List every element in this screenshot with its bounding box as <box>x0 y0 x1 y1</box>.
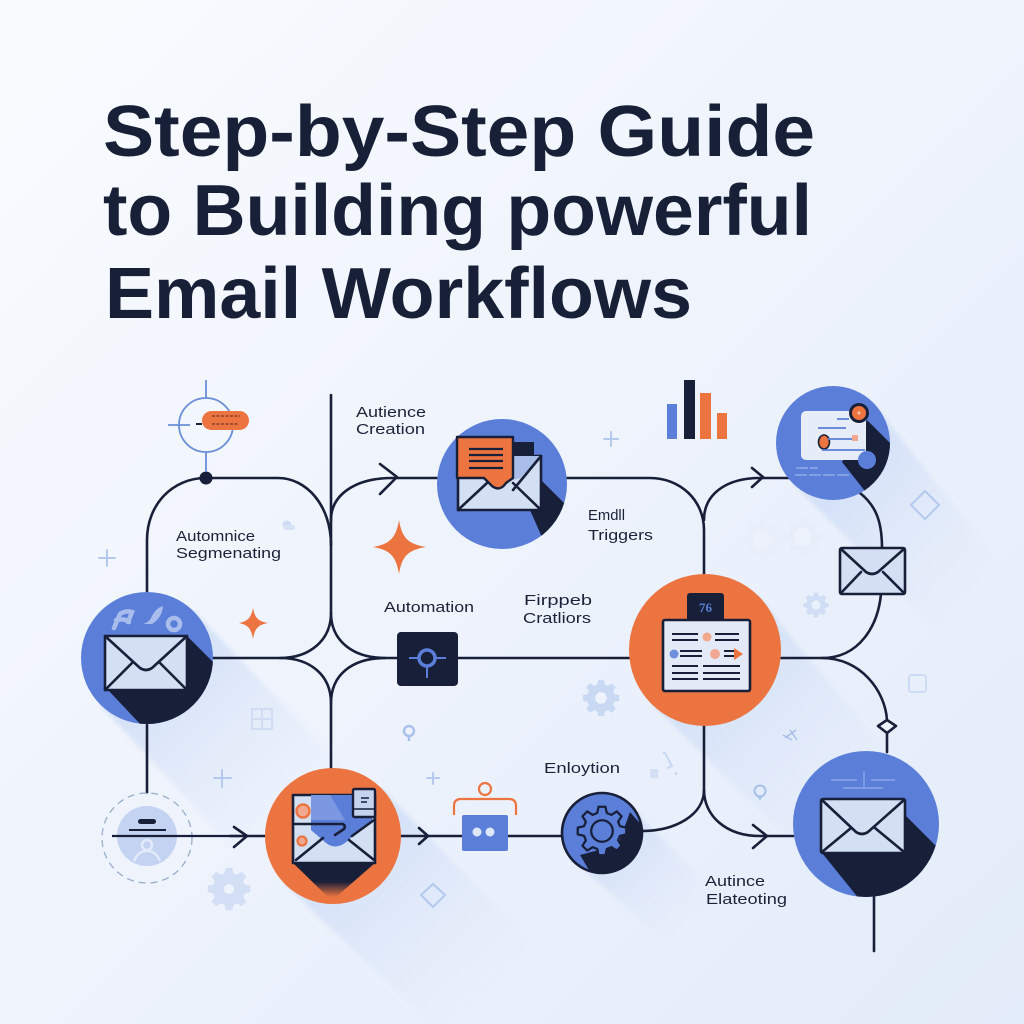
label: email triggers: Emdll <box>588 507 625 524</box>
label: audience creation <box>356 404 426 438</box>
node: automation square <box>397 632 458 686</box>
workflow connector lines <box>147 395 887 951</box>
title: to Building powerful <box>103 171 812 251</box>
label: email triggers: Triggers <box>588 527 653 544</box>
node: blue box with bracket <box>454 783 516 851</box>
label: audience creation: Autience <box>356 404 426 421</box>
label: firppeb cratliors <box>523 592 592 627</box>
label: firppeb cratliors: Firppeb <box>524 592 592 609</box>
label: firppeb cratliors: Cratliors <box>523 610 591 627</box>
node: orange document: 76 <box>699 600 712 615</box>
label: autince elateoting <box>705 873 787 908</box>
node: dashed user circle <box>102 793 240 883</box>
decorative icons <box>99 432 939 907</box>
label: automnice segmenating <box>176 528 281 562</box>
icon: envelope right <box>840 548 905 594</box>
node: audience creation email <box>437 419 575 549</box>
connector diamond <box>878 720 896 733</box>
title: Email Workflows <box>105 254 692 334</box>
node: top right message <box>776 386 900 500</box>
label: automnice segmenating: Segmenating <box>176 545 281 562</box>
label: audience creation: Creation <box>356 421 425 438</box>
label: automnice segmenating: Automnice <box>176 528 255 545</box>
decorative pale gears <box>208 518 828 910</box>
node: email blue left <box>81 592 213 724</box>
icon: sparkle large <box>373 520 426 574</box>
node: orange envelope <box>265 768 401 904</box>
node: orange document <box>629 574 781 726</box>
node dot <box>200 472 212 484</box>
long shadows <box>100 403 1005 1024</box>
icon: sparkle small <box>239 608 268 639</box>
node: bottom right envelope <box>793 751 939 897</box>
title <box>103 92 815 334</box>
icon: crosshair with orange pill <box>168 380 249 472</box>
label: autince elateoting: Autince <box>705 873 765 890</box>
label: autince elateoting: Elateoting <box>706 891 787 908</box>
title: Step-by-Step Guide <box>103 92 815 172</box>
label: email triggers <box>588 507 653 544</box>
label: automation: Automation <box>384 599 474 616</box>
node: gear circle <box>560 792 644 874</box>
bar chart <box>667 380 727 439</box>
label: enloytion: Enloytion <box>544 760 620 777</box>
